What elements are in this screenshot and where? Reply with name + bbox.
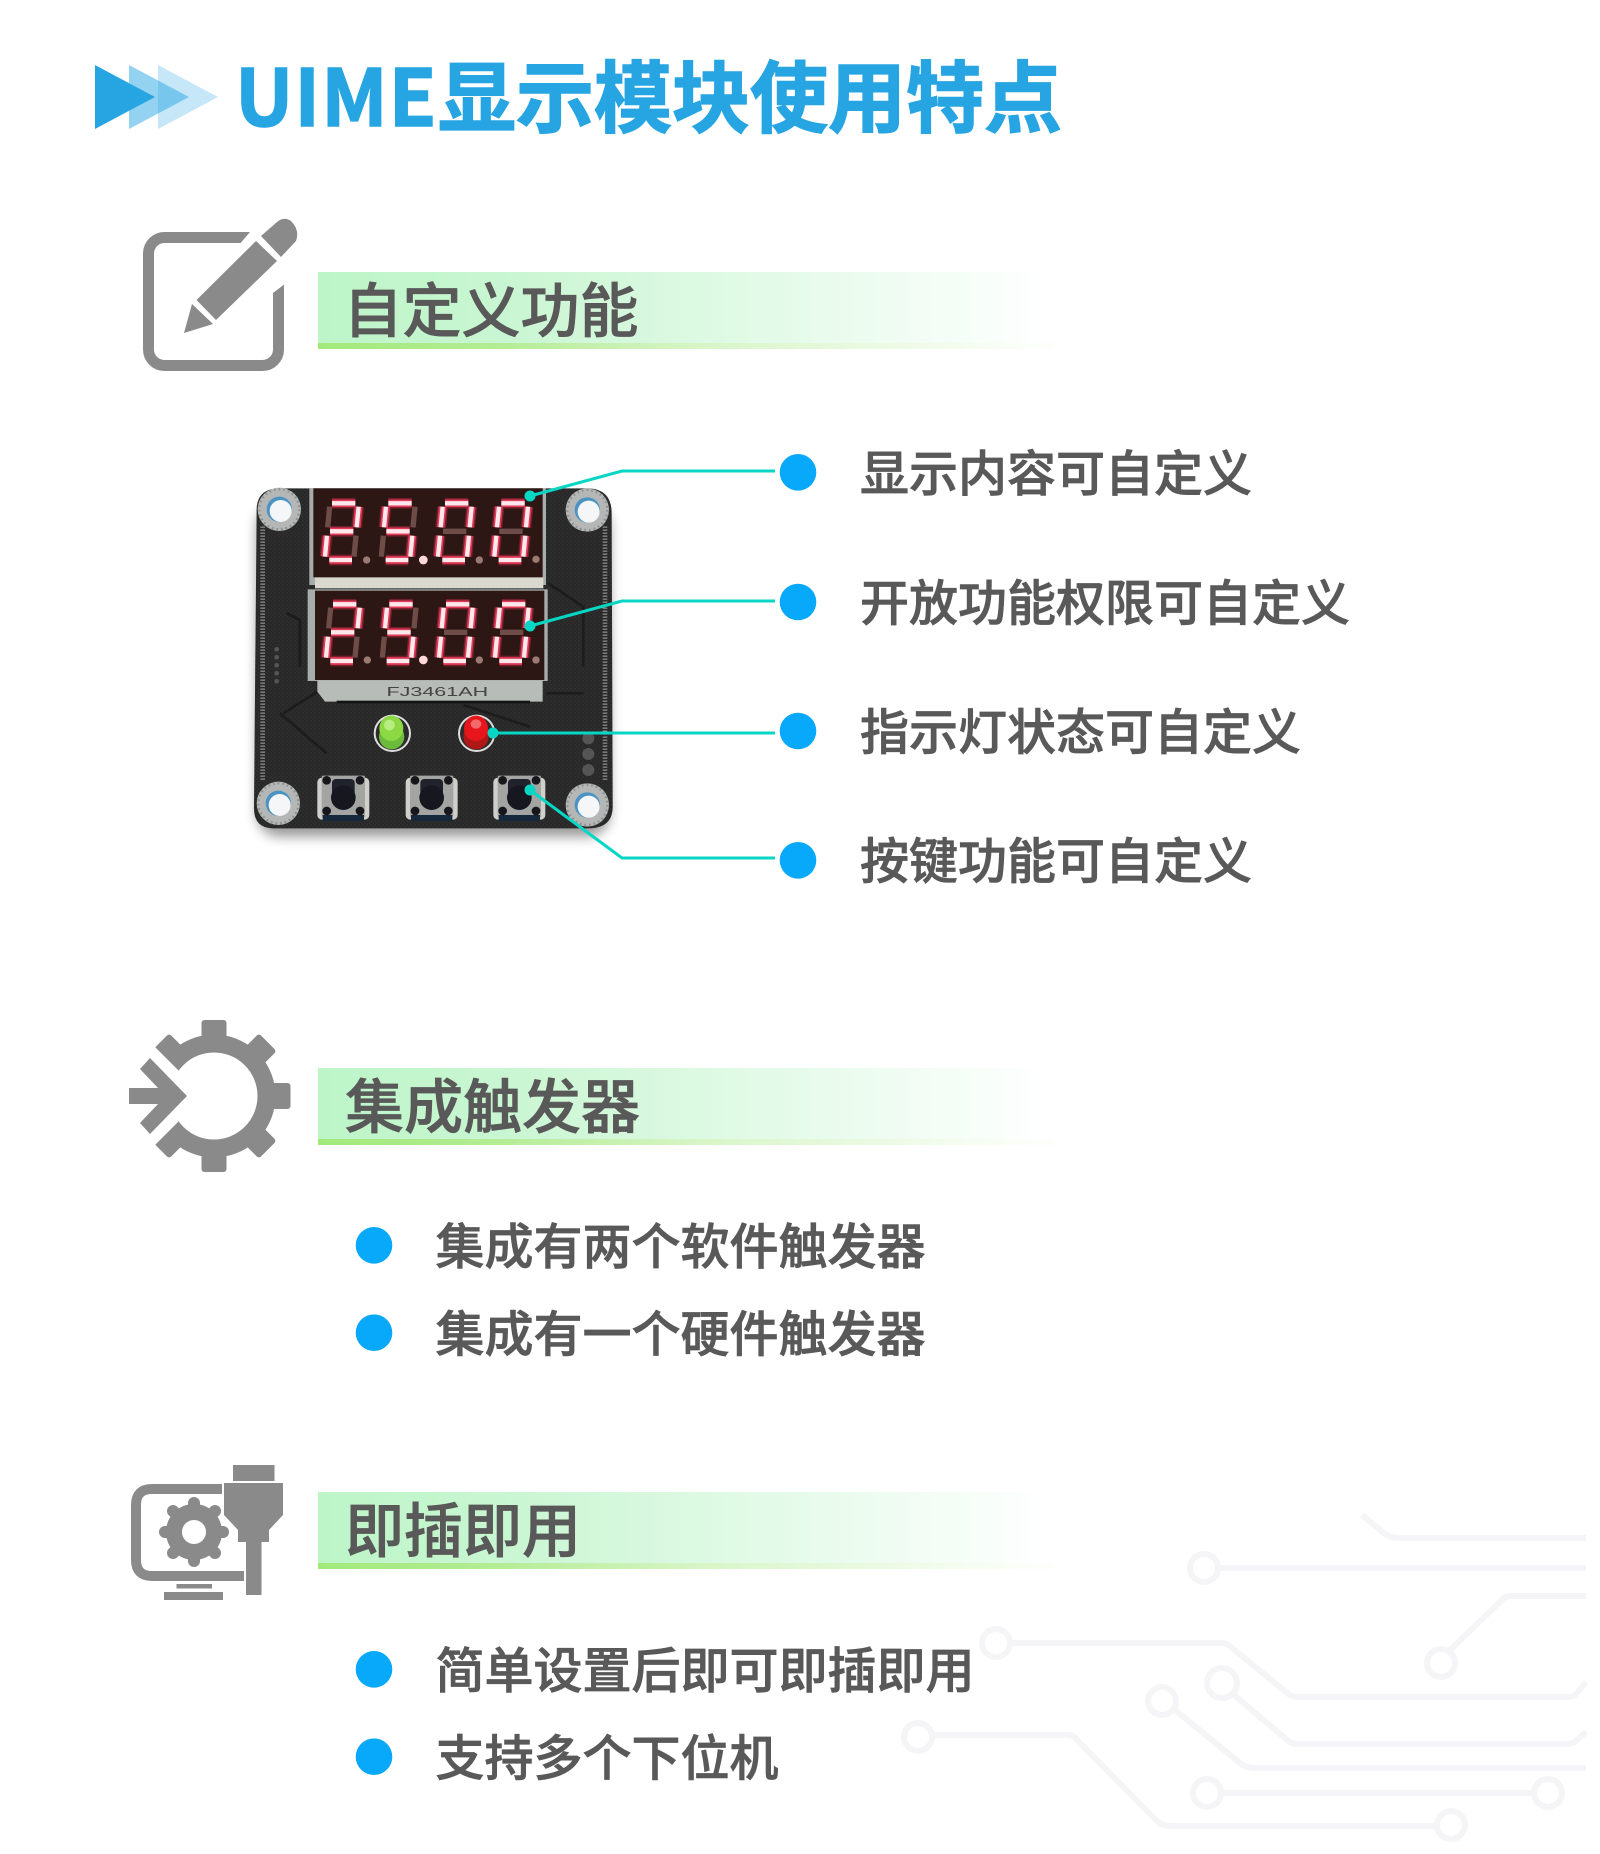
display one (309, 488, 546, 588)
part number: FJ3461AH (386, 685, 488, 699)
heading bar (318, 264, 1068, 349)
heading text: 集成触发器 (345, 1060, 640, 1145)
item: keys: 按键功能可自定义 (860, 822, 1252, 894)
heading text: 自定义功能 (344, 264, 639, 349)
LED red (458, 715, 495, 752)
heading bar (318, 1060, 1068, 1145)
LED green (374, 715, 411, 752)
heading bar (318, 1484, 1068, 1569)
item: open permissions: 开放功能权限可自定义 (860, 564, 1350, 636)
PCB module photo illustration (254, 488, 613, 837)
section: plug and play (136, 1465, 1068, 1790)
title text: UIME (235, 37, 438, 149)
section: custom functions (148, 219, 1350, 893)
icon: triple chevron arrows (95, 65, 218, 129)
feature list (780, 435, 1350, 894)
item: simple setup: 简单设置后即可即插即用 (436, 1632, 975, 1703)
heading text: 即插即用 (345, 1484, 581, 1569)
push buttons (317, 776, 545, 821)
connector holes (582, 732, 594, 776)
item: software triggers: 集成有两个软件触发器 (436, 1208, 926, 1279)
icon: monitor with gear and plug (136, 1465, 283, 1600)
title text: 显示模块使用特点 (438, 37, 1062, 149)
title (95, 37, 1062, 149)
item: indicator lights: 指示灯状态可自定义 (860, 694, 1301, 764)
item: hardware trigger: 集成有一个硬件触发器 (436, 1296, 926, 1366)
display two (308, 589, 548, 702)
plug and play list (356, 1632, 975, 1790)
trigger list (356, 1208, 926, 1366)
pads (274, 647, 279, 684)
item: multiple slaves: 支持多个下位机 (436, 1720, 779, 1790)
section: integrated triggers (100, 1012, 1068, 1366)
background circuit pattern (904, 1515, 1586, 1839)
icon: edit pencil (148, 219, 300, 366)
item: display content: 显示内容可自定义 (860, 435, 1252, 506)
icon: gear with arrow (100, 1012, 290, 1180)
callout connectors (488, 471, 775, 858)
